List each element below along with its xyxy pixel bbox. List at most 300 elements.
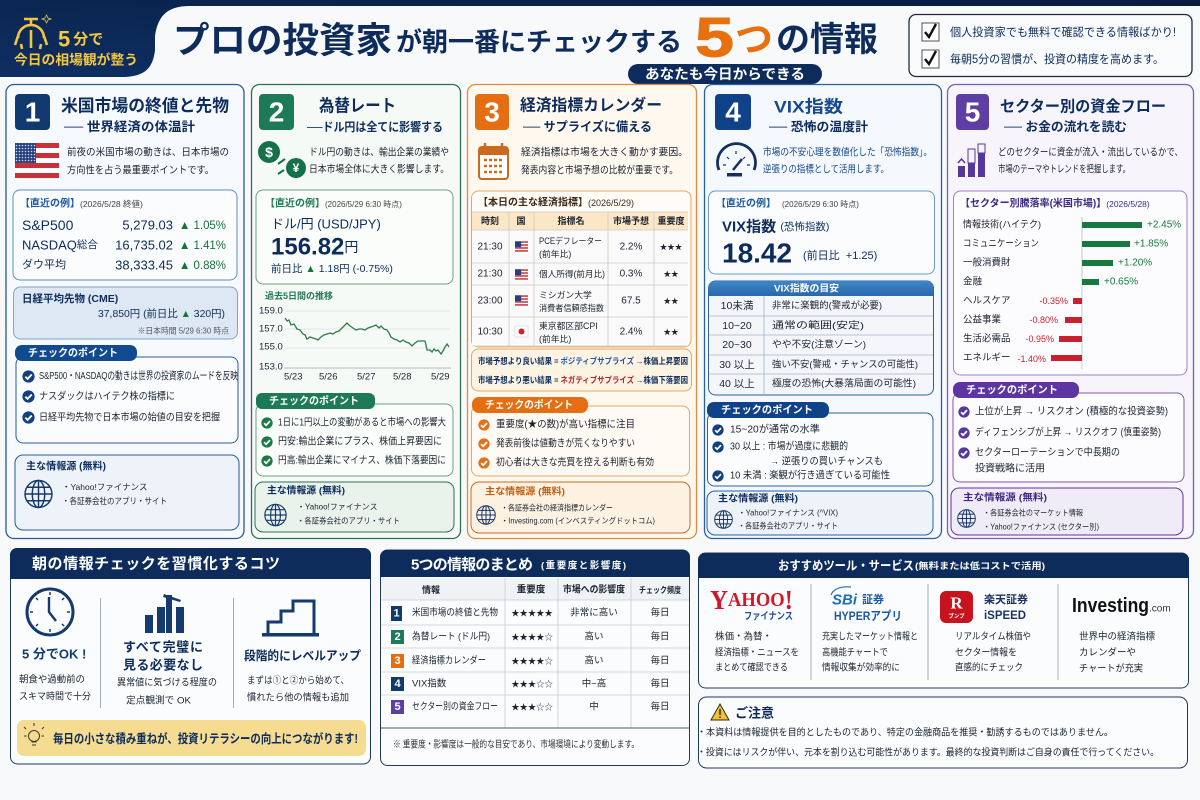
tool: Yahoo: YAHOO! <box>710 585 793 615</box>
row 2 <box>477 268 679 280</box>
summary table <box>381 578 689 728</box>
panel header <box>10 548 371 579</box>
tool: Investing.com: 世界中の経済指標 <box>1079 630 1155 642</box>
panel 3 description: 発表内容と市場予想の比較が重要です。 <box>521 164 678 176</box>
point 1 <box>712 422 820 436</box>
icon: warning triangle <box>711 704 729 720</box>
caution heading: ご注意 <box>735 706 774 720</box>
title: が朝一番にチェックする <box>396 27 682 57</box>
recent example box: ▲ 1.41% <box>179 238 226 252</box>
panel: 5つの情報のまとめ <box>380 550 690 766</box>
title: の情報 <box>776 21 878 59</box>
VIX guide table: 通常の範囲(安定) <box>772 320 864 332</box>
panel 5: セクター別の資金フロー <box>948 84 1194 538</box>
economic indicator table <box>472 191 691 347</box>
tool: Yahoo: ファイナンス <box>744 610 793 622</box>
sources 3 <box>471 482 690 533</box>
row 2 <box>391 630 670 644</box>
bar: 金融 <box>963 276 1138 288</box>
tool: Investing.com: チャートが充実 <box>1079 662 1143 674</box>
tool: Rakuten <box>940 591 1031 674</box>
recent example box: 前日比 ▲ 1.18円 (-0.75%) <box>271 262 393 275</box>
recent example box: ▲ 1.05% <box>179 218 226 232</box>
point 2: ディフェンシブが上昇 → リスクオフ (慎重姿勢) <box>975 426 1161 438</box>
point 1: 1日に1円以上の変動があると市場への影響大 <box>278 416 446 428</box>
VIX guide table: 10未満 <box>721 300 754 312</box>
caution text: ・本資料は情報提供を目的としたものであり、特定の金融商品を推奨・勧誘するものではありません。 <box>697 726 1113 738</box>
row 1: 1 <box>393 608 400 620</box>
bar: ヘルスケア: -0.35% <box>1039 296 1068 306</box>
tool: Rakuten: リアルタイム株価や <box>955 630 1031 642</box>
badge headline: 5分で <box>58 26 103 52</box>
tool: Rakuten: iSPEED <box>984 608 1026 622</box>
tool: SBI: SBi <box>832 592 858 608</box>
point 2: ナスダックはハイテク株の指標に <box>39 390 175 402</box>
panel 5 heading: セクター別の資金フロー <box>1000 96 1166 116</box>
tool: Investing.com: Investing <box>1072 595 1149 617</box>
panel 5 description <box>998 146 1183 176</box>
title: プロの投資家 <box>173 20 392 60</box>
tip: 段階的にレベルアップ: 慣れたら他の情報も追加 <box>247 692 349 704</box>
recent example box: 【直近の例】(2026/5/28 終値) <box>20 196 143 210</box>
check points 2: チェックのポイント <box>269 395 359 407</box>
number badge 5 <box>956 94 989 130</box>
top banner band and badge background <box>0 0 1200 77</box>
row 5 <box>391 700 670 714</box>
row 2: 2 <box>394 631 401 643</box>
row 3: 経済指標カレンダー <box>412 654 486 666</box>
Nikkei futures box: 日経平均先物 (CME) <box>22 292 118 305</box>
bar: エネルギー <box>963 352 1082 364</box>
panel 2 description <box>309 146 449 176</box>
panel header: おすすめツール・サービス <box>778 558 914 573</box>
tip: すべて完璧に見る必要なし <box>117 594 217 706</box>
surprise note: 市場予想より悪い結果 = ネガティブサプライズ →株価下落要因 <box>478 375 688 385</box>
recent example box <box>256 190 453 284</box>
tip: 段階的にレベルアップ: まずは①と②から始めて、 <box>247 674 349 686</box>
row 1: 毎日 <box>650 606 670 618</box>
bar: 情報技術 <box>963 218 1181 230</box>
sources 4: 主な情報源 (無料) <box>718 492 798 504</box>
panel 4 description: 逆張りの指標として活用します。 <box>763 162 889 176</box>
row 2: ★★ <box>664 270 679 278</box>
panel 2: 為替レート <box>252 84 460 538</box>
recent example box: ▲ 0.88% <box>179 258 226 272</box>
recent example box: 18.42 <box>722 238 792 268</box>
icon: globe <box>25 481 52 507</box>
divider <box>100 598 234 708</box>
point 3 <box>261 454 446 467</box>
point 3 <box>478 456 654 469</box>
economic indicator table: 指標名 <box>557 215 585 226</box>
row 3: ★★★★☆ <box>511 656 553 666</box>
economic indicator table: 時刻 <box>481 215 499 226</box>
summary table: 重要度 <box>517 584 546 596</box>
icon: dollar yen exchange <box>258 141 306 178</box>
recent example box: 5,279.03 <box>122 218 173 232</box>
icon: light bulb <box>24 723 44 745</box>
row 4: VIX指数 <box>412 678 447 690</box>
point 3: 投資戦略に活用 <box>975 462 1045 474</box>
row 4: (前年比) <box>539 333 571 344</box>
tool: Yahoo <box>710 585 799 674</box>
row 4: 中~高 <box>582 678 606 690</box>
panel header: (重要度と影響度) <box>541 560 626 572</box>
line chart: 過去5日間の推移: 5/28 <box>393 372 412 382</box>
row 3 <box>391 654 670 668</box>
row 4: 2.4% <box>620 326 643 338</box>
row 1: PCEデフレーター <box>539 235 602 246</box>
row 4 <box>477 320 679 344</box>
panel 4 heading: VIX指数 <box>774 98 843 116</box>
tool: Investing.com <box>1072 595 1171 674</box>
panel 5 description: 市場のテーマやトレンドを把握します。 <box>998 162 1130 176</box>
tool: Investing.com: .com <box>1149 604 1171 614</box>
point 3 <box>958 446 1120 474</box>
number badge 3 <box>475 94 509 130</box>
yellow message bar <box>17 720 366 756</box>
check points 4 <box>707 402 933 486</box>
number badge 4 <box>715 94 751 130</box>
check points 1: チェックのポイント <box>28 347 118 359</box>
sources 3: 主な情報源 (無料) <box>485 486 565 498</box>
tool: SBI: 証券 <box>862 592 884 606</box>
row 5: 毎日 <box>650 700 670 712</box>
point 3: セクターローテーションで中長期の <box>975 446 1120 458</box>
number badge 2 <box>259 94 294 130</box>
tool: Yahoo: 株価・為替・ <box>715 630 772 642</box>
badge: 5分で今日の相場観が整う <box>14 15 138 68</box>
panel 4 subheading: ── 恐怖の温度計 <box>768 119 869 134</box>
bar: エネルギー: -1.40% <box>1017 354 1046 364</box>
icon: US flag <box>15 143 59 178</box>
tool: Rakuten: 楽天証券 <box>984 592 1028 606</box>
VIX guide table: 10~20 <box>722 320 752 332</box>
panel 1: 米国市場の終値と先物 <box>6 84 244 538</box>
bar: 一般消費財: +1.20% <box>1118 258 1152 268</box>
sources 5 <box>951 488 1183 535</box>
row 2: 21:30 <box>477 268 503 280</box>
bar: 公益事業: 公益事業 <box>963 314 1002 326</box>
summary table: 情報 <box>422 584 440 595</box>
panel: おすすめツール・サービス <box>698 553 1189 688</box>
sources 2: 主な情報源 (無料) <box>267 484 345 496</box>
row 4: 4 <box>394 678 401 690</box>
title: つ <box>735 19 773 61</box>
check points 2 <box>256 393 453 476</box>
panel 1 subheading: ── 世界経済の体温計 <box>63 119 196 134</box>
panel header <box>380 550 690 577</box>
recent example box: S&P500 <box>22 217 74 233</box>
row 4: 東京都区部CPI <box>539 320 598 331</box>
recent example box <box>13 190 237 280</box>
row 4: ★★★☆☆ <box>511 679 553 689</box>
panel: 朝の情報チェックを習慣化するコツ <box>10 548 371 764</box>
icon: clock <box>27 589 73 635</box>
sector bar chart <box>954 191 1187 375</box>
panel header <box>698 553 1189 578</box>
economic indicator table: 国 <box>516 216 526 226</box>
point 1: 重要度(★の数)が高い指標に注目 <box>496 418 635 430</box>
row 1: ★★★★★ <box>511 608 553 618</box>
icon: sector bars <box>958 144 985 177</box>
panel header: 朝の情報チェックを習慣化するコツ <box>32 554 280 572</box>
point 3: 日経平均先物で日本市場の始値の目安を把握 <box>39 410 220 424</box>
line chart: 過去5日間の推移: 155.0 <box>259 342 283 352</box>
tool: SBI: 情報収集が効率的に <box>822 662 900 674</box>
sources 2: ・Yahoo!ファイナンス <box>297 502 377 512</box>
point 2: 発表前後は値動きが荒くなりやすい <box>496 436 635 450</box>
tip: 段階的にレベルアップ: 段階的にレベルアップ <box>244 648 361 663</box>
sources 4: ・Yahoo!ファイナンス (^VIX) <box>738 508 838 518</box>
VIX guide table: 40 以上 <box>719 378 755 390</box>
panel 2 description: ドル円の動きは、輸出企業の業績や <box>309 146 449 158</box>
row 5: 中 <box>589 700 599 712</box>
row 5: ★★★☆☆ <box>511 702 553 712</box>
Nikkei futures box <box>14 287 238 339</box>
bar: エネルギー: エネルギー <box>963 352 1011 364</box>
line chart: 過去5日間の推移: 5/27 <box>357 372 376 382</box>
number badge 5: 5 <box>965 96 980 128</box>
icon: globe <box>265 504 286 526</box>
tip: 5分でOK: スキマ時間で十分 <box>19 690 91 702</box>
sector bar chart: 【セクター別騰落率(米国市場)】(2026/5/28) <box>960 196 1150 210</box>
icon: dollar yen exchange: $ <box>265 144 273 160</box>
row 4: 毎日 <box>650 678 670 690</box>
row 3: ★★ <box>664 296 679 306</box>
VIX guide table <box>708 281 934 395</box>
number badge 1: 1 <box>25 96 40 128</box>
row 3: 毎日 <box>650 654 670 666</box>
surprise note <box>472 349 692 391</box>
row 5: セクター別の資金フロー <box>412 700 498 712</box>
point 2: 30 以上 : 市場が過度に悲観的 <box>730 440 848 452</box>
panel 2 subheading: ──ドル円は全てに影響する <box>306 119 443 134</box>
row 3: ミシガン大学 <box>539 289 592 300</box>
panel 4 description <box>763 146 932 176</box>
row 3 <box>477 289 679 313</box>
check points 3 <box>472 397 690 476</box>
point 2 <box>22 390 175 403</box>
bar: 生活必需品 <box>963 332 1082 344</box>
line chart: 過去5日間の推移: 5/23 <box>284 372 302 382</box>
panel 1 heading: 米国市場の終値と先物 <box>61 96 229 116</box>
sources 2: ・各証券会社のアプリ・サイト <box>297 516 400 526</box>
check points 5: チェックのポイント <box>966 384 1058 396</box>
VIX guide table: 非常に楽観的(警戒が必要) <box>772 300 882 312</box>
row 1 <box>477 235 683 259</box>
row 3: 高い <box>584 654 604 666</box>
panel header: (無料または低コストで活用) <box>915 560 1045 571</box>
summary table: チェック頻度 <box>639 585 681 595</box>
icon: gauge <box>717 144 756 176</box>
line chart: 過去5日間の推移: 5/29 <box>431 372 450 382</box>
bar: 情報技術: +2.45% <box>1147 220 1181 230</box>
number badge 1 <box>15 94 50 130</box>
bar: 生活必需品: 生活必需品 <box>963 332 1011 344</box>
row 5: 5 <box>394 701 401 713</box>
tip: 5分でOK <box>19 589 91 702</box>
check points 4: チェックのポイント <box>721 404 813 416</box>
caution text: ・投資にはリスクが伴い、元本を割り込む可能性があります。最終的な投資判断はご自身の責任で行ってください。 <box>697 746 1159 758</box>
sources 5: ・各証券会社のマーケット情報 <box>983 508 1083 518</box>
panel 1 description: 方向性を占う最重要ポイントです。 <box>67 164 214 176</box>
recent example box: 【直近の例】(2026/5/29 6:30 時点) <box>265 196 402 210</box>
sources 4 <box>707 491 933 535</box>
recent example box: ダウ平均 <box>22 257 66 271</box>
row 2: 為替レート (ドル円) <box>412 630 490 642</box>
VIX guide table: VIX指数の目安 <box>774 282 839 294</box>
recent example box: 38,333.45 <box>115 258 173 272</box>
panel: ご注意 <box>697 697 1188 768</box>
point 1: 上位が上昇 → リスクオン (積極的な投資姿勢) <box>975 404 1168 418</box>
row 3: 67.5 <box>621 296 641 306</box>
recent example box <box>708 191 934 274</box>
bar: 情報技術: 情報技術(ハイテク) <box>963 218 1041 230</box>
row 3: 23:00 <box>477 296 503 306</box>
point 1 <box>261 416 446 429</box>
row 4 <box>391 677 670 691</box>
surprise note: 市場予想より良い結果 = ポジティブサプライズ →株価上昇要因 <box>478 356 688 366</box>
panel 1 description: 前夜の米国市場の動きは、日本市場の <box>67 146 229 158</box>
point 2 <box>958 426 1161 439</box>
row 1: (前年比) <box>539 248 571 259</box>
point 2 <box>712 440 883 468</box>
tip: 5分でOK: 朝食や過動前の <box>19 674 85 686</box>
tool: SBI: HYPERアプリ <box>834 609 902 623</box>
bar: コミュニケーション: コミュニケーション <box>963 238 1039 250</box>
callout line 1: 個人投資家でも無料で確認できる情報ばかり! <box>950 25 1176 39</box>
bar: 金融: +0.65% <box>1104 276 1138 288</box>
row 2: 毎日 <box>650 630 670 642</box>
tool: SBI <box>822 587 918 674</box>
row 3: 3 <box>394 655 401 667</box>
row 1 <box>391 606 670 621</box>
tip: すべて完璧に見る必要なし: すべて完璧に <box>123 640 203 654</box>
tip: 5分でOK: 5 分でOK ! <box>22 646 86 662</box>
bar: 一般消費財: 一般消費財 <box>963 256 1011 268</box>
tool: Rakuten: ブンブ <box>948 612 965 620</box>
row 1: ★★★ <box>660 242 683 252</box>
recent example box: VIX指数 (恐怖指数) <box>722 218 829 236</box>
row 2: 個人所得(前月比) <box>539 268 605 279</box>
sources 1 <box>15 455 239 530</box>
economic indicator table: 重要度 <box>657 215 685 226</box>
row 1: 2.2% <box>620 242 643 252</box>
recent example box: NASDAQ総合 <box>22 238 98 252</box>
Nikkei futures box: 37,850円 (前日比 ▲ 320円) <box>98 307 225 320</box>
icon: dollar yen exchange: ¥ <box>293 161 300 175</box>
table note: ※ 重要度・影響度は一般的な目安であり、市場環境により変動します。 <box>393 738 639 750</box>
tool: Rakuten: セクター情報を <box>955 646 1017 658</box>
sources 5: ・Yahoo!ファイナンス (セクター別) <box>983 522 1099 532</box>
row 4: 10:30 <box>477 326 503 338</box>
bar: コミュニケーション: +1.85% <box>1134 238 1168 250</box>
bar: 公益事業 <box>963 314 1082 326</box>
panel 2 description: 日本市場全体に大きく影響します。 <box>309 162 449 176</box>
recent example box: 【直近の例】 (2026/5/29 6:30 時点) <box>716 196 859 210</box>
sources 4: ・各証券会社のアプリ・サイト <box>738 520 838 530</box>
callout: check box <box>909 14 1192 76</box>
panel 3 subheading: ── サプライズに備える <box>522 119 652 134</box>
line chart: 過去5日間の推移: 159.0 <box>259 306 283 316</box>
line chart: 過去5日間の推移: 5/26 <box>319 372 338 382</box>
tip: すべて完璧に見る必要なし: 定点観測で OK <box>126 694 192 706</box>
point 2 <box>478 436 635 450</box>
panel 3 heading: 経済指標カレンダー <box>520 96 662 114</box>
bar: コミュニケーション <box>963 238 1168 250</box>
panel 2 heading: 為替レート <box>319 96 396 116</box>
bar: 公益事業: -0.80% <box>1029 315 1058 325</box>
point 2 <box>261 434 442 448</box>
point 1 <box>22 369 238 383</box>
bar: 生活必需品: -0.95% <box>1025 334 1054 344</box>
yellow message bar: 毎日の小さな積み重ねが、投資リテラシーの向上につながります! <box>53 731 358 746</box>
panel header: 5つの情報のまとめ <box>411 556 533 574</box>
point 3: 初心者は大きな売買を控える判断も有効 <box>496 456 654 468</box>
icon: globe <box>958 510 975 527</box>
tool: Rakuten: R <box>950 594 963 612</box>
icon: bars <box>145 594 184 633</box>
point 1: S&P500・NASDAQの動きは世界の投資家のムードを反映 <box>39 369 238 382</box>
panel 3: 経済指標カレンダー <box>468 84 696 538</box>
point 3: 円高:輸出企業にマイナス、株価下落要因に <box>278 454 446 466</box>
point 3: 10 未満 : 楽観が行き過ぎている可能性 <box>730 468 890 482</box>
pill: あなたも今日からできる: あなたも今日からできる <box>645 66 805 82</box>
tool: SBI: 高機能チャートで <box>822 646 888 658</box>
dividers <box>811 584 1058 680</box>
point 2: → 逆張りの買いチャンスも <box>770 454 883 468</box>
tool: SBI: 充実したマーケット情報と <box>822 630 918 642</box>
check points 3: チェックのポイント <box>485 399 573 411</box>
sources 3: ・各証券会社の経済指標カレンダー <box>501 502 613 512</box>
bar: 金融: 金融 <box>963 276 982 288</box>
row 3: 消費者信頼感指数 <box>539 302 604 313</box>
panel 3 description: 経済指標は市場を大きく動かす要因。 <box>521 146 688 158</box>
bar: ヘルスケア <box>963 296 1082 306</box>
recent example box: (前日比 +1.25) <box>803 248 877 262</box>
number badge 3: 3 <box>484 96 500 128</box>
panel 3 description <box>521 146 688 176</box>
title <box>173 6 878 68</box>
icon: checkbox 2 <box>922 50 939 68</box>
sources 1: 主な情報源 (無料) <box>26 460 106 472</box>
caution text <box>697 726 1159 758</box>
bar: 一般消費財 <box>963 256 1152 268</box>
number badge 2: 2 <box>269 96 284 128</box>
Nikkei futures box: ※日本時間 5/29 6:30 時点 <box>138 326 229 336</box>
panel 4: VIX指数 <box>704 84 942 538</box>
row 2: 高い <box>584 630 604 642</box>
tip: 段階的にレベルアップ <box>244 601 361 704</box>
panel 5 subheading: ── お金の流れを読む <box>1003 119 1127 134</box>
icon: globe <box>715 511 732 528</box>
recent example box: 156.82円 <box>271 234 358 260</box>
line chart: 過去5日間の推移: 153.0 <box>259 362 283 372</box>
economic indicator table: 【本日の主な経済指標】(2026/5/29) <box>478 196 634 208</box>
panel 1 description <box>67 146 229 176</box>
VIX guide table: 30 以上 <box>719 359 755 371</box>
row 1: 非常に高い <box>570 606 618 618</box>
icon: stairs <box>262 601 319 636</box>
tool: Yahoo: 経済指標・ニュースを <box>715 646 799 658</box>
tip: すべて完璧に見る必要なし: 見る必要なし <box>123 658 203 672</box>
title: 5 <box>695 6 734 68</box>
VIX guide table: やや不安(注意ゾーン) <box>772 338 866 350</box>
sources 3: ・Investing.com (インベスティングドットコム) <box>501 516 655 526</box>
row 2: ★★★★☆ <box>511 632 553 642</box>
sources 5: 主な情報源 (無料) <box>963 492 1047 504</box>
